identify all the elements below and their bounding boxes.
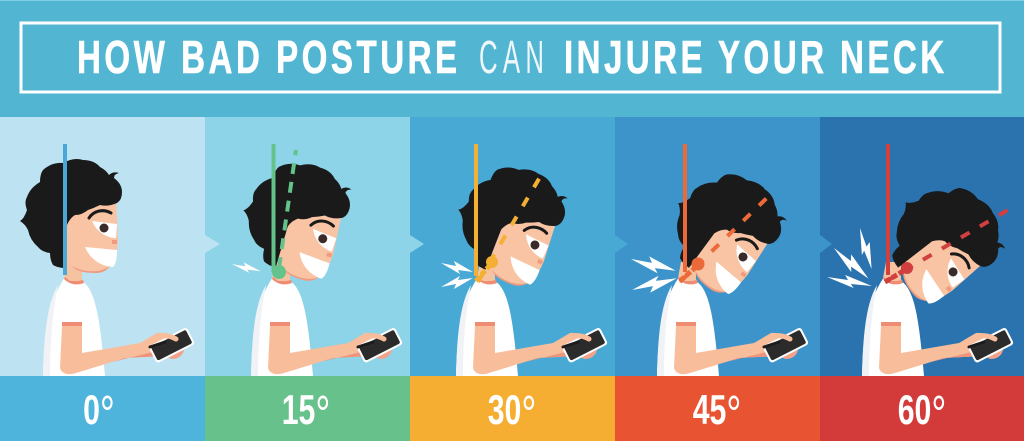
label: 45 degrees <box>615 376 820 441</box>
arrow: panel 4 to 5 <box>820 235 832 253</box>
panel: 30 degrees <box>410 117 615 376</box>
arrow: panel 3 to 4 <box>615 235 628 253</box>
label: 15 degrees <box>205 376 410 441</box>
label: 60 degrees <box>820 376 1024 441</box>
label: 30 degrees: 30 <box>488 386 521 433</box>
header band <box>0 0 1024 117</box>
label: 45 degrees: 45 <box>693 386 726 433</box>
panel: 0 degrees <box>0 117 205 376</box>
label: 0 degrees <box>0 376 205 441</box>
title box <box>21 23 1000 92</box>
arrow: panel 2 to 3 <box>410 235 424 253</box>
title box: HOW BAD POSTURE <box>77 33 457 83</box>
label: 0 degrees: 0 <box>83 386 100 433</box>
panel: 15 degrees <box>205 117 410 376</box>
label: 30 degrees <box>410 376 615 441</box>
label: 15 degrees: 15 <box>282 386 315 433</box>
panel: 60 degrees <box>820 117 1024 376</box>
panel: 45 degrees <box>615 117 820 376</box>
title box: CAN <box>479 31 544 83</box>
arrow: panel 1 to 2 <box>205 235 220 253</box>
title box: INJURE YOUR NECK <box>564 33 944 83</box>
label: 60 degrees: 60 <box>898 386 931 433</box>
